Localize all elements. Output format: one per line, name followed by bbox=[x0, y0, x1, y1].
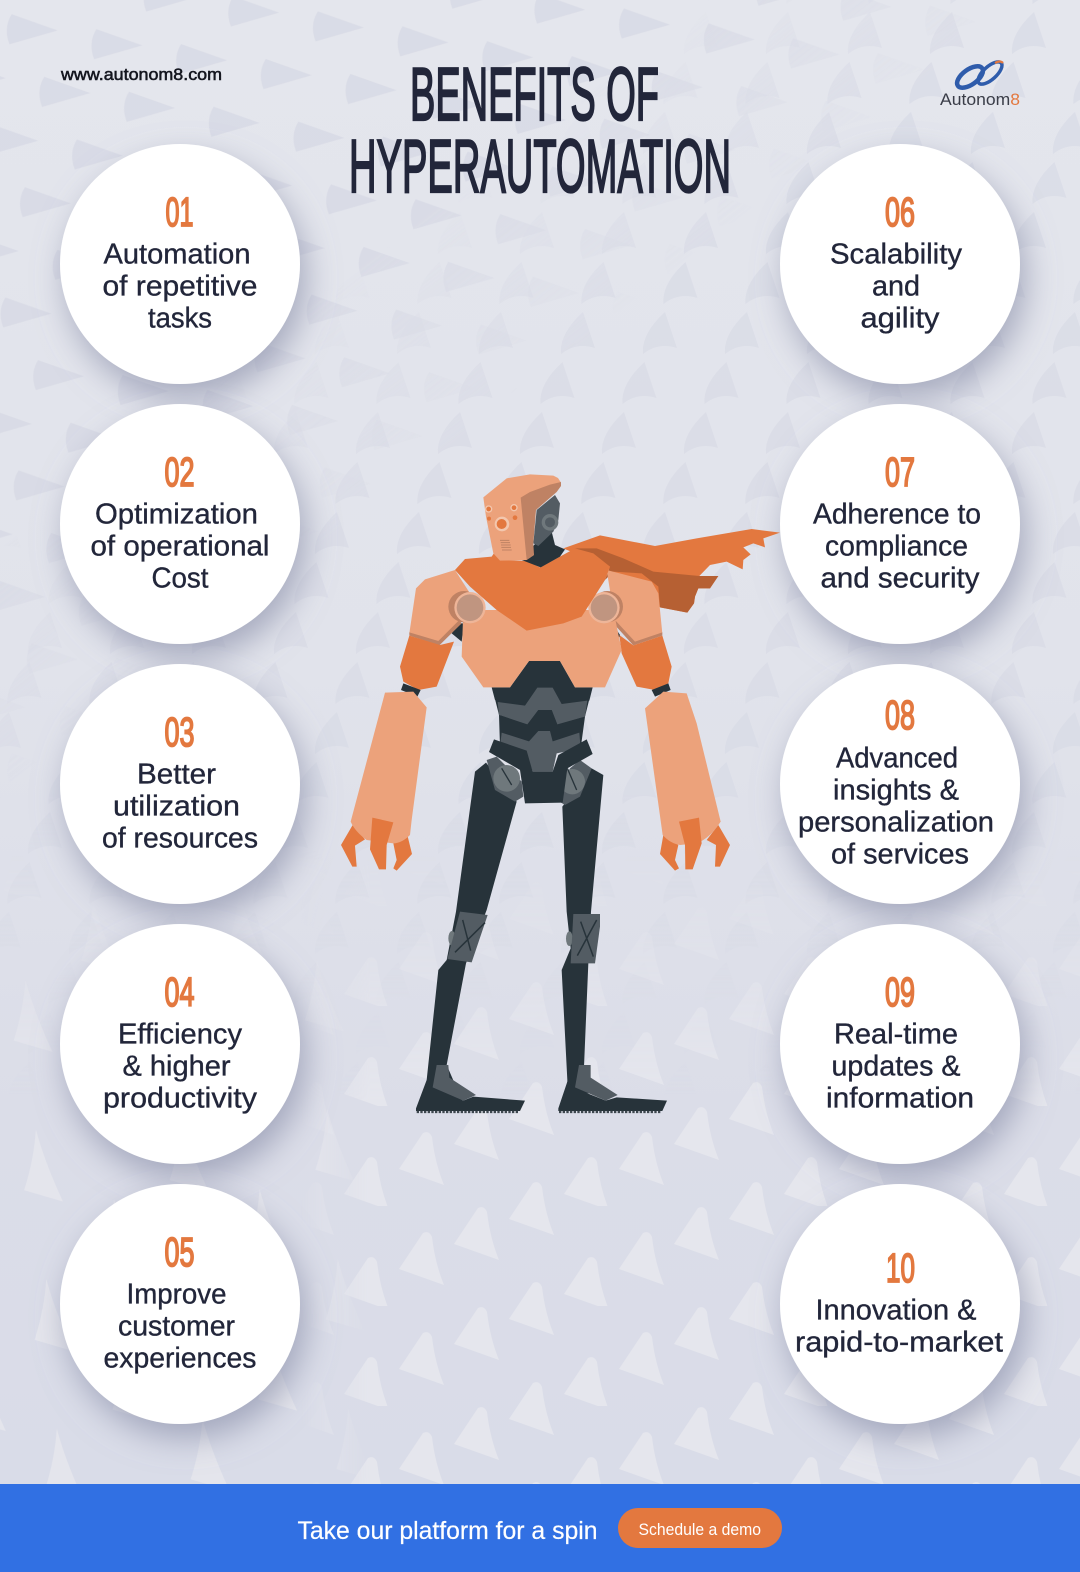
circle 04: 04 bbox=[164, 969, 194, 1015]
circle 10: 10 bbox=[886, 1245, 915, 1291]
circle 02: 02 bbox=[164, 449, 194, 495]
robot illustration bbox=[341, 474, 780, 1112]
logo: Autonom8 bbox=[940, 58, 1020, 109]
right arm bbox=[607, 570, 730, 871]
footer text: Take our platform for a spin bbox=[298, 1517, 598, 1545]
circle 03: 03 bbox=[164, 709, 194, 755]
circle 07: Adherence to bbox=[813, 498, 981, 530]
chest bbox=[462, 610, 622, 687]
title bbox=[349, 52, 731, 208]
circle 07: and security bbox=[820, 562, 980, 594]
knee pads bbox=[447, 912, 600, 963]
button: schedule a demo: Schedule a demo bbox=[638, 1521, 761, 1539]
circle 05: 05 bbox=[164, 1229, 194, 1275]
neck bbox=[522, 532, 565, 567]
circle 02: Optimization bbox=[95, 498, 258, 530]
button: schedule a demo bbox=[618, 1508, 782, 1548]
circle 09: information bbox=[826, 1082, 974, 1114]
circle 09: updates & bbox=[832, 1050, 960, 1082]
footer bar bbox=[0, 1484, 1080, 1572]
circle 04: productivity bbox=[103, 1082, 258, 1114]
left arm bbox=[341, 570, 470, 871]
circle 05 bbox=[60, 1184, 300, 1424]
circle 06: and bbox=[872, 270, 920, 302]
circle 08: Advanced bbox=[836, 742, 958, 774]
feet bbox=[416, 1065, 667, 1112]
circle 10: rapid-to-market bbox=[795, 1326, 1003, 1358]
title: HYPERAUTOMATION bbox=[349, 124, 731, 208]
circle 04 bbox=[60, 924, 300, 1164]
circle 08 bbox=[780, 664, 1020, 904]
circle 07: 07 bbox=[885, 449, 915, 495]
circle 01: of repetitive bbox=[102, 270, 258, 302]
circle 02 bbox=[60, 404, 300, 644]
circle 08: 08 bbox=[885, 692, 915, 738]
circle 03: of resources bbox=[102, 822, 258, 854]
circle 09: 09 bbox=[885, 969, 915, 1015]
circle 07 bbox=[780, 404, 1020, 644]
title: BENEFITS OF bbox=[410, 52, 659, 136]
shoulder joints bbox=[448, 591, 623, 623]
circle 08: of services bbox=[831, 838, 969, 870]
circle 08: personalization bbox=[798, 806, 994, 838]
circle 06: 06 bbox=[885, 189, 915, 235]
website url: www.autonom8.com bbox=[60, 65, 222, 84]
circle 01 bbox=[60, 144, 300, 384]
circle 05: Improve bbox=[126, 1278, 226, 1310]
circle 10: Innovation & bbox=[816, 1294, 976, 1326]
circle 03 bbox=[60, 664, 300, 904]
legs bbox=[427, 763, 603, 1103]
circle 01: tasks bbox=[148, 302, 212, 334]
cape bbox=[563, 529, 780, 613]
circle 04: & higher bbox=[122, 1050, 231, 1082]
circle 06 bbox=[780, 144, 1020, 384]
circle 09: Real-time bbox=[834, 1018, 958, 1050]
circle 03: Better bbox=[137, 758, 217, 790]
circle 08: insights & bbox=[833, 774, 959, 806]
circle 05: customer bbox=[118, 1310, 236, 1342]
head bbox=[483, 474, 561, 561]
circle 01: Automation bbox=[104, 238, 250, 270]
circle 06: Scalability bbox=[830, 238, 963, 270]
circle 09 bbox=[780, 924, 1020, 1164]
hip joints bbox=[487, 757, 592, 805]
circle 07: compliance bbox=[825, 530, 968, 562]
circle 03: utilization bbox=[113, 790, 240, 822]
circle 01: 01 bbox=[166, 189, 194, 235]
torso mechanics bbox=[489, 661, 593, 803]
circle 04: Efficiency bbox=[118, 1018, 243, 1050]
circle 06: agility bbox=[860, 302, 940, 334]
logo: Autonom8: Autonom8 bbox=[940, 90, 1020, 109]
circle 05: experiences bbox=[104, 1342, 256, 1374]
scarf bbox=[455, 548, 610, 631]
circle 10 bbox=[780, 1184, 1020, 1424]
circle 02: of operational bbox=[90, 530, 270, 562]
circle 02: Cost bbox=[152, 562, 209, 594]
